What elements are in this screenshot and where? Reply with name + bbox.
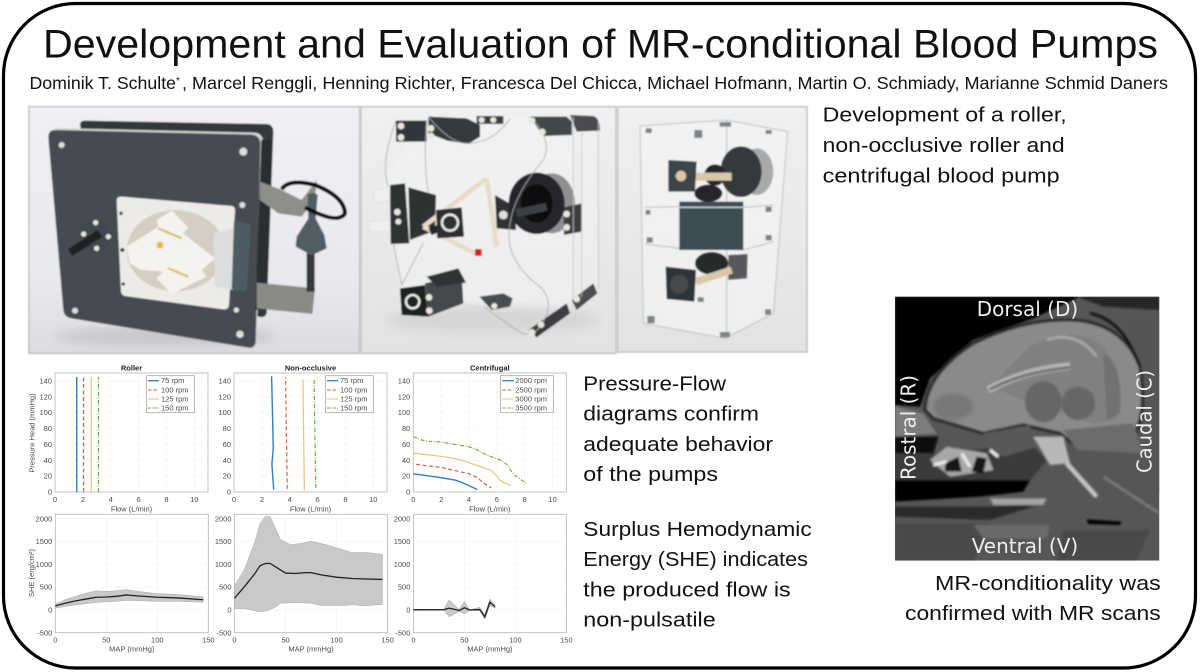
chart: centrifugal SHE: 1500: [394, 537, 410, 546]
chart: centrifugal SHE: 2000: [394, 514, 410, 523]
chart: roller pressure-flow: 4: [109, 495, 113, 504]
chart: roller pressure-flow: [28, 364, 208, 514]
chart: non-occlusive pressure-flow: 40: [223, 456, 231, 465]
authors: Dominik T. Schulte: [30, 73, 176, 93]
chart: centrifugal pressure-flow: Flow (L/min): [469, 504, 511, 514]
legend: 3500 rpm: [515, 404, 547, 412]
text: pump development: [823, 104, 1067, 188]
chart: non-occlusive pressure-flow: 8: [343, 495, 347, 504]
text: SHE finding: Energy (SHE) indicates: [583, 548, 808, 571]
title: Development and Evaluation of MR-conditional Blood Pumps: [43, 22, 1158, 66]
chart: centrifugal pressure-flow: 0: [406, 488, 410, 496]
chart: non-occlusive SHE: 500: [219, 583, 232, 592]
legend: 100 rpm: [340, 386, 368, 394]
chart: roller pressure-flow: 0: [48, 488, 52, 496]
legend: 2000 rpm: [515, 376, 547, 385]
chart: roller pressure-flow: 6: [137, 495, 141, 504]
text: SHE finding: [583, 518, 812, 632]
chart: roller pressure-flow: 8: [164, 495, 168, 504]
label: dorsal: Dorsal (D): [977, 297, 1078, 321]
chart: roller pressure-flow: Roller: [121, 364, 142, 372]
chart: non-occlusive pressure-flow: 120: [218, 392, 231, 401]
legend: 75 rpm: [161, 376, 184, 385]
photo: non-occlusive roller pump: [361, 107, 616, 353]
chart: roller pressure-flow: 0: [53, 495, 57, 504]
text: pressure-flow finding: [583, 373, 773, 486]
chart: non-occlusive SHE: 50: [281, 636, 290, 644]
label: ventral: Ventral (V): [972, 534, 1078, 558]
label: rostral: Rostral (R): [896, 375, 920, 480]
chart: non-occlusive SHE: 1000: [215, 560, 232, 569]
text: SHE finding: Surplus Hemodynamic: [583, 518, 812, 541]
chart: non-occlusive pressure-flow: 0: [232, 495, 236, 504]
text: SHE finding: the produced flow is: [583, 579, 791, 602]
legend: 150 rpm: [340, 404, 368, 412]
chart: roller pressure-flow: 140: [39, 376, 52, 386]
chart: non-occlusive pressure-flow: 100: [218, 408, 231, 417]
chart: centrifugal SHE: MAP (mmHg): [467, 644, 513, 654]
chart: non-occlusive pressure-flow: 80: [223, 424, 231, 433]
label: caudal: Caudal (C): [1132, 370, 1156, 473]
chart: roller SHE: [27, 514, 215, 654]
text: pressure-flow finding: Pressure-Flow: [583, 373, 726, 396]
text: pressure-flow finding: diagrams confirm: [583, 403, 759, 426]
chart: centrifugal pressure-flow: [398, 364, 566, 514]
legend: 75 rpm: [340, 376, 363, 385]
chart: centrifugal pressure-flow: 40: [402, 456, 410, 465]
text: MR-conditionality finding: MR-conditionality was: [935, 572, 1161, 595]
chart: roller SHE: 1000: [36, 560, 52, 569]
text: SHE finding: non-pulsatile: [583, 609, 716, 632]
chart: non-occlusive SHE: -500: [216, 628, 232, 637]
chart: roller SHE: SHE (erg/cm²): [27, 549, 36, 597]
chart: non-occlusive pressure-flow: 20: [223, 472, 231, 481]
chart: roller SHE: MAP (mmHg): [109, 644, 155, 654]
chart: roller SHE: 0: [48, 606, 52, 614]
text: pump development: non-occlusive roller and: [823, 134, 1065, 157]
text: pressure-flow finding: of the pumps: [583, 463, 718, 486]
chart: roller SHE: -500: [37, 628, 52, 637]
chart: centrifugal SHE: [394, 514, 573, 654]
chart: non-occlusive pressure-flow: 140: [218, 376, 231, 386]
chart: centrifugal pressure-flow: 140: [398, 376, 410, 386]
legend: 100 rpm: [161, 386, 189, 394]
chart: centrifugal pressure-flow: Centrifugal: [470, 364, 510, 372]
chart: centrifugal SHE: 50: [460, 636, 469, 644]
chart: roller pressure-flow: 80: [44, 424, 52, 433]
chart: non-occlusive pressure-flow: 10: [369, 495, 377, 504]
chart: centrifugal pressure-flow: 120: [398, 392, 410, 401]
legend: 125 rpm: [340, 394, 368, 404]
legend: 150 rpm: [161, 404, 189, 412]
chart: roller pressure-flow: 40: [44, 456, 52, 465]
chart: roller SHE: 500: [40, 583, 52, 592]
chart: non-occlusive pressure-flow: 4: [288, 495, 292, 504]
chart: centrifugal SHE: 0: [411, 636, 415, 644]
chart: centrifugal pressure-flow: 8: [523, 495, 527, 504]
chart: centrifugal pressure-flow: 20: [402, 472, 410, 481]
chart: centrifugal pressure-flow: 4: [467, 495, 471, 504]
chart: roller pressure-flow: 2: [81, 495, 85, 504]
chart: non-occlusive pressure-flow: [218, 364, 387, 514]
photo: centrifugal pump: [618, 107, 807, 352]
chart: centrifugal pressure-flow: 2: [439, 495, 443, 504]
chart: roller pressure-flow: 20: [44, 472, 52, 481]
text: MR-conditionality finding: confirmed with MR scans: [905, 602, 1161, 625]
legend: [147, 376, 194, 413]
text: MR-conditionality finding: [905, 572, 1161, 625]
chart: roller SHE: 150: [202, 636, 215, 644]
chart: non-occlusive SHE: 2000: [215, 514, 232, 523]
chart: centrifugal SHE: 500: [398, 583, 410, 592]
chart: centrifugal SHE: 1000: [394, 560, 410, 569]
text: pressure-flow finding: adequate behavior: [583, 433, 773, 456]
photo: roller pump: [29, 107, 360, 353]
chart: non-occlusive pressure-flow: Non-occlusive: [285, 364, 336, 372]
chart: non-occlusive SHE: 0: [227, 606, 232, 614]
chart: non-occlusive SHE: 150: [381, 636, 394, 644]
chart: centrifugal SHE: 0: [406, 606, 410, 614]
chart: non-occlusive SHE: MAP (mmHg): [288, 644, 334, 654]
chart: centrifugal pressure-flow: 60: [402, 440, 410, 449]
legend: 125 rpm: [161, 394, 189, 404]
chart: centrifugal pressure-flow: 6: [495, 495, 499, 504]
text: pump development: centrifugal blood pump: [823, 165, 1060, 188]
chart: non-occlusive pressure-flow: 2: [260, 495, 264, 504]
legend: 2500 rpm: [515, 386, 547, 394]
chart: roller SHE: 2000: [36, 514, 52, 523]
chart: roller SHE: 0: [53, 636, 57, 644]
legend: [501, 376, 553, 413]
chart: roller pressure-flow: 10: [190, 495, 198, 504]
chart: centrifugal pressure-flow: 0: [411, 495, 415, 504]
chart: roller pressure-flow: 100: [39, 408, 52, 417]
chart: roller pressure-flow: 60: [44, 440, 52, 449]
chart: centrifugal pressure-flow: 80: [402, 424, 410, 433]
chart: roller SHE: 1500: [36, 537, 52, 546]
chart: non-occlusive pressure-flow: Flow (L/min): [290, 504, 332, 514]
chart: roller SHE: 100: [151, 636, 164, 644]
chart: centrifugal pressure-flow: 100: [398, 408, 410, 417]
legend: [326, 376, 373, 413]
chart: non-occlusive pressure-flow: 6: [316, 495, 320, 504]
chart: centrifugal SHE: -500: [395, 628, 410, 637]
authors: , Marcel Renggli, Henning Richter, Francesca Del Chicca, Michael Hofmann, Martin O. Schmiady, Marianne Schmid Daners: [182, 73, 1168, 93]
chart: non-occlusive SHE: [215, 514, 394, 654]
authors: *: [176, 76, 180, 87]
chart: roller pressure-flow: Pressure Head (mmHg): [28, 393, 36, 473]
MR scan image: [895, 297, 1159, 561]
chart: roller SHE: 50: [102, 636, 110, 644]
chart: non-occlusive SHE: 1500: [215, 537, 232, 546]
chart: centrifugal SHE: 150: [560, 636, 573, 644]
chart: roller pressure-flow: 120: [39, 392, 52, 401]
text: pump development: Development of a roller,: [823, 104, 1067, 127]
chart: non-occlusive pressure-flow: 0: [227, 488, 231, 496]
chart: non-occlusive SHE: 0: [232, 636, 237, 644]
chart: centrifugal SHE: 100: [509, 636, 522, 644]
chart: non-occlusive pressure-flow: 60: [223, 440, 231, 449]
chart: centrifugal pressure-flow: 10: [548, 495, 557, 504]
chart: roller pressure-flow: Flow (L/min): [111, 504, 153, 514]
chart: non-occlusive SHE: 100: [330, 636, 343, 644]
legend: 3000 rpm: [515, 394, 547, 404]
